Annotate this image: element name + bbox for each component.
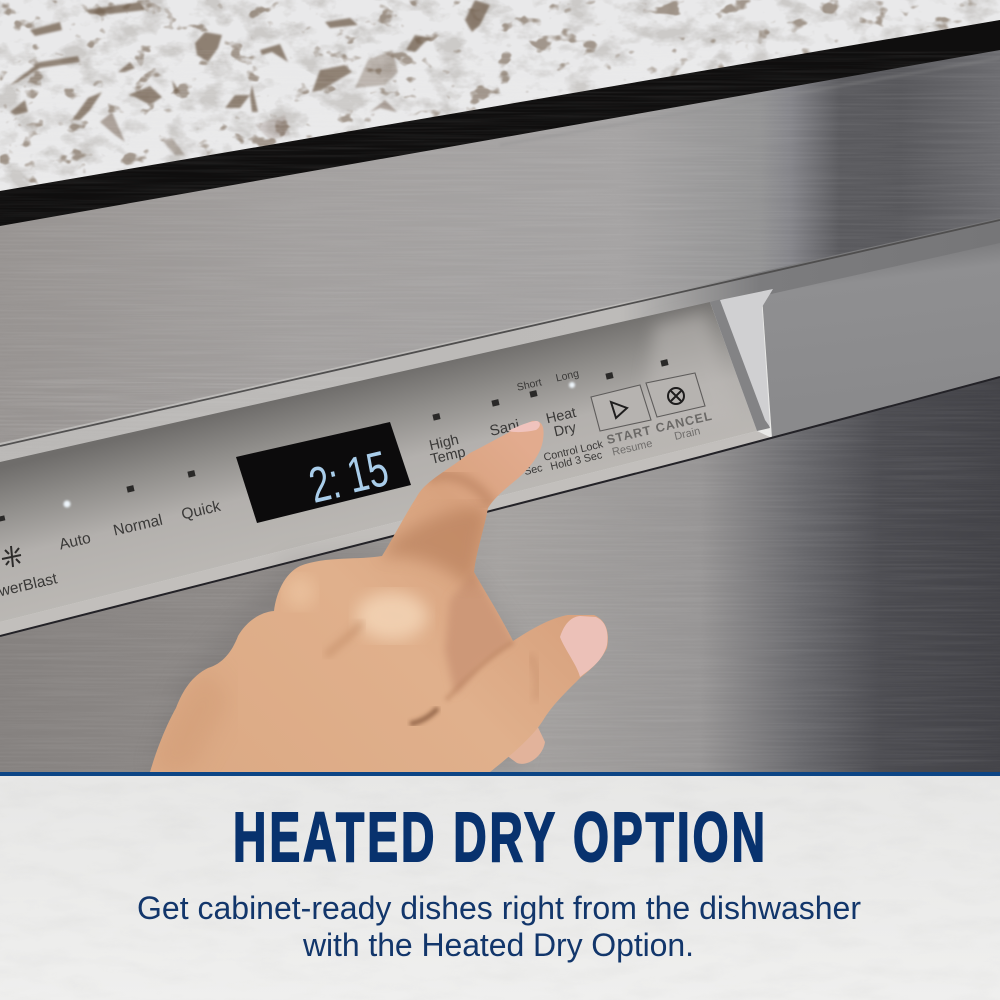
panel labels: Short — [516, 376, 543, 394]
panel labels: Temp — [429, 444, 467, 468]
control panel face — [0, 302, 757, 622]
lit indicators — [64, 382, 575, 508]
upper stainless fascia — [0, 50, 1000, 446]
blue divider — [0, 772, 1000, 776]
panel labels — [0, 368, 605, 600]
panel labels: High — [428, 432, 460, 454]
counter edge — [996, 20, 997, 21]
cancel label: CANCEL — [654, 409, 714, 435]
start button — [591, 385, 654, 459]
wedge shadow strip — [710, 299, 770, 431]
time readout minutes: 15 — [342, 442, 394, 504]
panel labels: Heat — [545, 405, 578, 427]
time readout hours: 2: — [304, 454, 346, 514]
cancel button — [646, 373, 714, 443]
panel labels: Auto — [58, 530, 92, 553]
indicator lights — [0, 359, 669, 522]
panel labels: Quick — [180, 498, 222, 523]
lower edge shade — [150, 668, 230, 772]
hand pressing button — [150, 421, 608, 772]
gap under counter — [0, 20, 1000, 228]
tendon shadow — [326, 622, 362, 656]
countertop — [0, 0, 1000, 192]
digital display — [236, 422, 411, 523]
hand silhouette — [150, 421, 608, 772]
title: HEATED DRY OPTION — [233, 797, 765, 876]
panel labels: Long — [555, 368, 580, 385]
panel labels: Normal — [112, 512, 164, 540]
thumb web crease — [410, 708, 438, 724]
resume label: Resume — [611, 438, 654, 459]
panel labels: Sani — [488, 417, 521, 440]
hand shading — [150, 475, 538, 772]
start label: START — [605, 423, 653, 447]
knuckle highlight — [284, 575, 316, 609]
description line 2: with the Heated Dry Option. — [302, 927, 694, 963]
knuckle shadow — [380, 507, 488, 590]
door handle recess — [762, 243, 1000, 438]
play icon — [611, 402, 627, 418]
panel right side light area — [648, 309, 720, 381]
panel labels: Dry — [552, 420, 579, 440]
middle finger tone — [444, 580, 510, 690]
ring finger tip — [508, 728, 545, 764]
black seam — [0, 377, 1000, 636]
drain label: Drain — [673, 425, 701, 443]
panel labels: Control Lock — [542, 438, 605, 464]
band texture — [0, 776, 1000, 1000]
hand shadow — [190, 555, 515, 771]
thumbnail — [560, 616, 608, 677]
back highlight — [356, 592, 428, 640]
caption band — [0, 772, 1000, 1000]
thumb joint crease — [530, 655, 538, 700]
fingernail — [508, 421, 540, 432]
powerblast icon — [2, 546, 21, 567]
description line 1: Get cabinet-ready dishes right from the dishwasher — [137, 890, 861, 926]
panel labels: Hold 3 Sec — [549, 449, 604, 473]
chrome trim wedge — [720, 289, 773, 427]
lower door — [0, 377, 1000, 772]
finger joint shadow — [428, 475, 492, 505]
panel labels: Sec — [523, 462, 544, 478]
thumb top shadow — [446, 642, 513, 700]
band background — [0, 776, 1000, 1000]
chrome rail — [0, 218, 1000, 463]
photo: dishwasher control panel — [0, 0, 1000, 772]
lower lip — [0, 431, 772, 636]
cancel icon — [668, 388, 684, 404]
